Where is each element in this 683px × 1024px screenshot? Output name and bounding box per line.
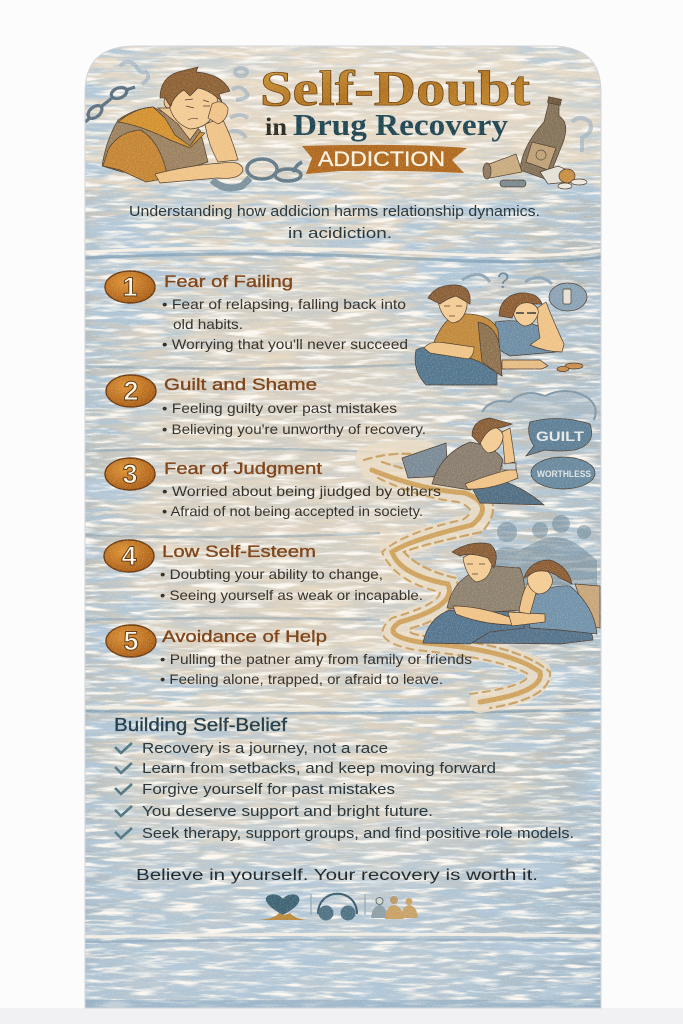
boy legs [423, 610, 525, 644]
bullets: • Worrying that you'll never succeed [162, 336, 408, 352]
pill bottle [540, 166, 572, 184]
item 3: fear of judgment [105, 458, 441, 519]
question mark: ? [497, 268, 509, 293]
item 1: fear of failing [105, 271, 408, 352]
title [260, 60, 530, 142]
pills [500, 180, 526, 187]
bullets: • Afraid of not being accepted in society. [162, 503, 423, 519]
hair [160, 67, 230, 106]
boy crossed arm [424, 342, 474, 359]
legs [472, 480, 544, 505]
illustration: broken chain under hand [212, 159, 302, 188]
girl torso [527, 586, 597, 634]
illustration: silhouettes of onlookers [490, 515, 597, 585]
speech bubble: worthless [531, 457, 595, 489]
orange sleeve and hood [103, 130, 168, 182]
page shadow [0, 1008, 683, 1024]
bullets: • Feeling alone, trapped, or afraid to leave. [160, 671, 443, 687]
arm with phone [465, 468, 518, 489]
icon: heart in hands [258, 894, 308, 920]
title line: Drug Recovery: Drug Recovery [293, 107, 509, 142]
list items: You deserve support and bright future. [142, 804, 433, 820]
hand on head [208, 102, 228, 124]
number badge 1 [105, 271, 155, 303]
title line: in: in [265, 114, 287, 141]
list items: Recovery is a journey, not a race [142, 741, 388, 757]
thought smoke [462, 274, 552, 284]
checklist [115, 741, 574, 842]
thought cloud [482, 391, 596, 420]
subtitle: in acidiction. [288, 225, 392, 242]
panel grain overlay [85, 46, 601, 1008]
torso [432, 442, 503, 490]
illustration: couple comforting each other [423, 543, 600, 644]
girl head [527, 570, 552, 594]
bullets: old habits. [173, 316, 243, 332]
ribbon: addiction: ADDICTION [318, 148, 445, 171]
list items [142, 741, 574, 842]
number badge 2 [106, 375, 156, 407]
bullets: • Worried about being jiudged by others [162, 483, 441, 499]
bullets: • Pulling the patner amy from family or friends [160, 651, 472, 667]
item 4: low self-esteem [104, 540, 423, 603]
bottle [520, 102, 566, 180]
heading: Guilt and Shame [164, 375, 317, 394]
check marks [115, 743, 132, 838]
hoodie body [102, 107, 208, 176]
number badge 4 [104, 540, 154, 572]
heading: Building Self-Belief [114, 715, 288, 735]
illustration: winding road [364, 451, 550, 708]
number badge 3: 3 [122, 459, 138, 489]
number badge 2: 2 [123, 376, 139, 406]
list items: Seek therapy, support groups, and find positive role models. [142, 826, 574, 842]
neck [158, 108, 200, 140]
boy torso [447, 566, 525, 612]
subtitle [129, 203, 540, 242]
speech bubble: guilt [526, 418, 592, 456]
icon row [258, 894, 418, 920]
phone thought bubble [549, 283, 587, 311]
clasped arms [453, 606, 512, 625]
girl shirt [495, 321, 558, 356]
list items: Forgive yourself for past mistakes [142, 782, 395, 798]
girl lower arm and coins [502, 360, 548, 369]
boy head [438, 292, 467, 323]
bullets: • Fear of relapsing, falling back into [162, 296, 406, 312]
number badge 4: 4 [121, 541, 137, 571]
girl legs [470, 622, 593, 644]
heading: Fear of Judgment [164, 459, 322, 478]
bullets [162, 400, 426, 437]
speech bubble: worthless: WORTHLESS [537, 469, 591, 479]
icon: three people [371, 896, 418, 919]
title line: Self-Doubt: Self-Doubt [260, 60, 530, 116]
panel: textured card background [85, 46, 601, 1008]
item 2: guilt and shame [106, 375, 426, 437]
girl arm [530, 302, 564, 352]
sofa [575, 584, 600, 628]
tipped can [484, 154, 522, 178]
bullets [160, 651, 472, 687]
bullets [162, 483, 441, 519]
number badge 1: 1 [122, 272, 138, 302]
face [168, 84, 218, 129]
heading: Avoidance of Help [162, 627, 327, 646]
subtitle: Understanding how addicion harms relationship dynamics. [129, 203, 540, 220]
propping arm [205, 118, 238, 162]
illustration: boy with phone and word bubbles [402, 391, 596, 505]
section: building self-belief [114, 715, 574, 842]
heading: Fear of Failing [164, 272, 293, 291]
bullets [160, 566, 423, 603]
divider marks [311, 894, 365, 915]
head [478, 426, 503, 453]
panel edge frame [85, 46, 601, 1008]
speech bubble: guilt: GUILT [536, 428, 585, 444]
illustration: header smoke and question marks [120, 62, 591, 152]
forearm and hand [155, 162, 243, 183]
heading: Low Self-Esteem [162, 542, 316, 561]
item 5: avoidance of help [106, 625, 472, 687]
number badge 5: 5 [123, 626, 139, 656]
girl head [513, 302, 538, 326]
bullets: • Feeling guilty over past mistakes [162, 400, 397, 416]
bullets: • Doubting your ability to change, [160, 566, 383, 582]
ribbon: addiction [302, 145, 467, 174]
closing statement: Believe in yourself. Your recovery is worth it. [136, 867, 538, 884]
boy hoodie [434, 314, 502, 376]
illustration: bottle and pills [483, 97, 587, 189]
bullets: • Seeing yourself as weak or incapable. [160, 587, 423, 603]
boy head [463, 552, 492, 582]
list items: Learn from setbacks, and keep moving forward [142, 761, 496, 777]
bullets: • Believing you're unworthy of recovery. [162, 421, 426, 437]
number badge 3 [105, 458, 155, 490]
eyes and mouth [185, 99, 210, 120]
number badge 5 [106, 625, 156, 657]
bullets [162, 296, 408, 352]
sofa [402, 443, 448, 478]
illustration: worried boy with hand on head [102, 67, 243, 183]
boy jeans [415, 347, 497, 385]
illustration: broken chain top left [85, 86, 135, 122]
illustration: worried pair with question mark [415, 268, 587, 385]
icon: headphones [318, 894, 357, 920]
